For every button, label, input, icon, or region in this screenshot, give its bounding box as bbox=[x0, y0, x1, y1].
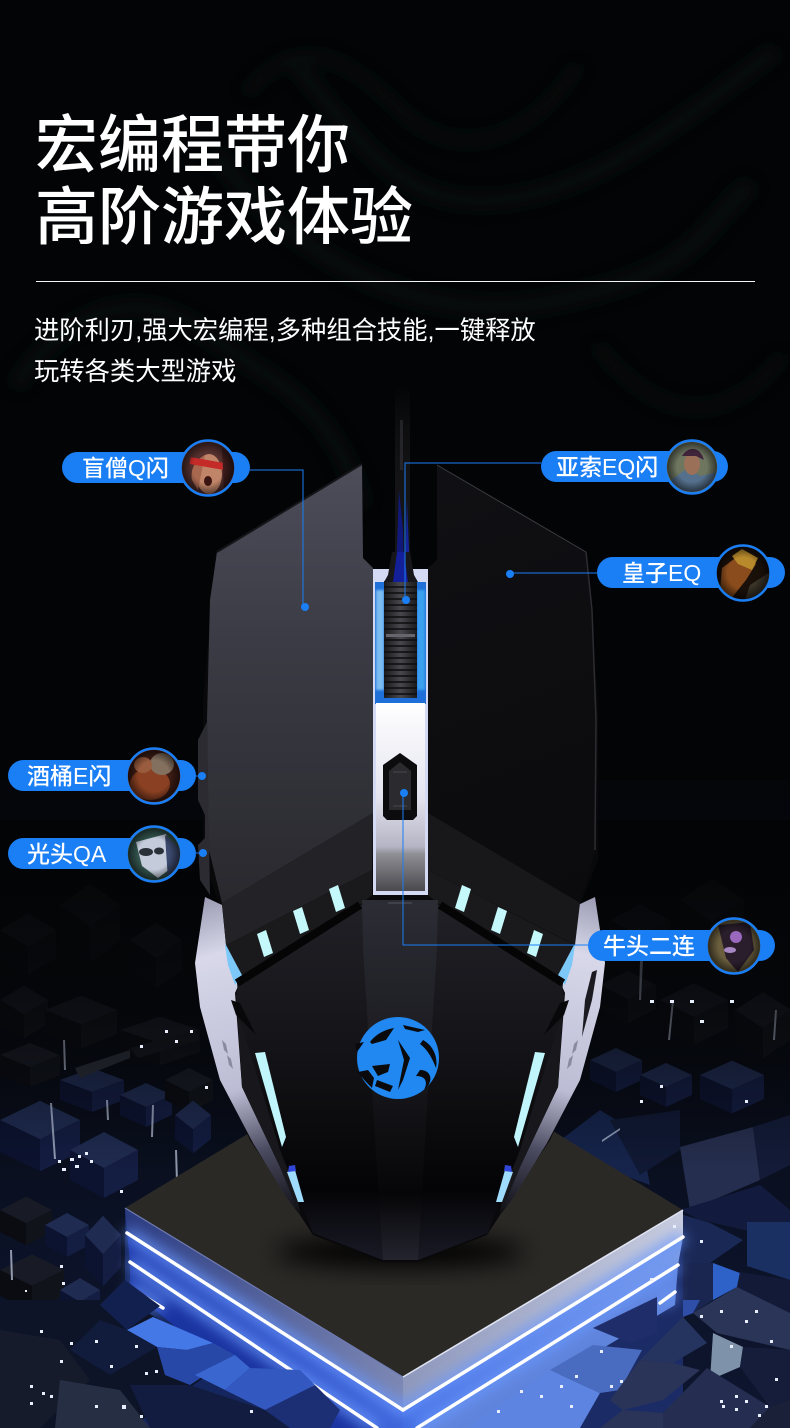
palm rest bbox=[231, 900, 569, 1260]
left lower section bbox=[222, 813, 373, 945]
background: circuit city bbox=[0, 780, 790, 1428]
scroll wheel bbox=[384, 581, 417, 698]
callout: 亚索EQ闪 bbox=[402, 440, 728, 604]
title: 宏编程带你 bbox=[35, 111, 350, 181]
right button edge bbox=[437, 465, 586, 552]
platform front blocks left bbox=[0, 1280, 340, 1428]
platform neon lines bbox=[127, 1233, 683, 1428]
side button bbox=[198, 722, 210, 895]
title bbox=[35, 111, 413, 253]
callout: 酒桶E闪: 酒桶E闪 bbox=[27, 763, 111, 789]
platform front blocks right bbox=[467, 1287, 790, 1428]
right lower section bbox=[428, 813, 580, 945]
title: 高阶游戏体验 bbox=[35, 183, 413, 253]
left button top edge bbox=[217, 464, 362, 552]
lion logo bbox=[355, 1017, 439, 1099]
callout: 牛头二连 bbox=[400, 789, 775, 975]
callout: 盲僧Q闪 bbox=[62, 440, 309, 611]
side light strips left bbox=[231, 1000, 304, 1202]
mouse bbox=[8, 111, 785, 1262]
right main button bbox=[428, 465, 596, 903]
right outer edge bbox=[586, 552, 596, 850]
subtitle text bbox=[34, 317, 536, 386]
city blocks left bbox=[0, 883, 213, 1428]
platform neon glow bbox=[127, 1233, 683, 1428]
side light strips right bbox=[496, 1000, 569, 1202]
mouse shadow bbox=[275, 1237, 525, 1267]
right side slit bbox=[582, 970, 597, 1037]
side silver shell left bbox=[195, 897, 300, 1215]
cable bbox=[395, 385, 410, 575]
city pale accents bbox=[75, 1050, 130, 1078]
callout: 亚索EQ闪: 亚索EQ闪 bbox=[556, 454, 658, 480]
city top fade bbox=[0, 820, 790, 1170]
city blocks right bbox=[550, 878, 790, 1315]
callout: 光头QA: 光头QA bbox=[27, 841, 107, 867]
mouse silhouette bbox=[195, 466, 605, 1262]
light slots bbox=[257, 885, 543, 957]
callout: 皇子EQ: 皇子EQ bbox=[622, 560, 701, 586]
platform city dots bbox=[25, 1000, 778, 1418]
background: faint dragon swirl bbox=[20, 55, 780, 500]
platform side faces bbox=[125, 1208, 683, 1428]
platform edge highlight bbox=[125, 1208, 403, 1377]
slot band bbox=[226, 870, 574, 977]
cable strain relief bbox=[384, 552, 418, 582]
callout: 盲僧Q闪: 盲僧Q闪 bbox=[82, 455, 169, 481]
callout: 牛头二连: 牛头二连 bbox=[603, 933, 695, 959]
callout: 皇子EQ bbox=[506, 546, 785, 602]
subtitle text: 进阶利刃,强大宏编程,多种组合技能,一键释放 bbox=[34, 317, 536, 345]
left main button bbox=[207, 464, 373, 903]
callout: 酒桶E闪 bbox=[8, 748, 206, 805]
platform bbox=[0, 1000, 790, 1428]
side silver shell right bbox=[500, 897, 605, 1215]
divider line bbox=[36, 281, 755, 282]
platform top bbox=[125, 1040, 683, 1377]
callout: 光头QA bbox=[8, 826, 207, 883]
center channel bbox=[373, 552, 428, 895]
DPI button bbox=[383, 753, 417, 820]
subtitle text: 玩转各类大型游戏 bbox=[34, 358, 236, 386]
city highlights bbox=[10, 960, 777, 1280]
